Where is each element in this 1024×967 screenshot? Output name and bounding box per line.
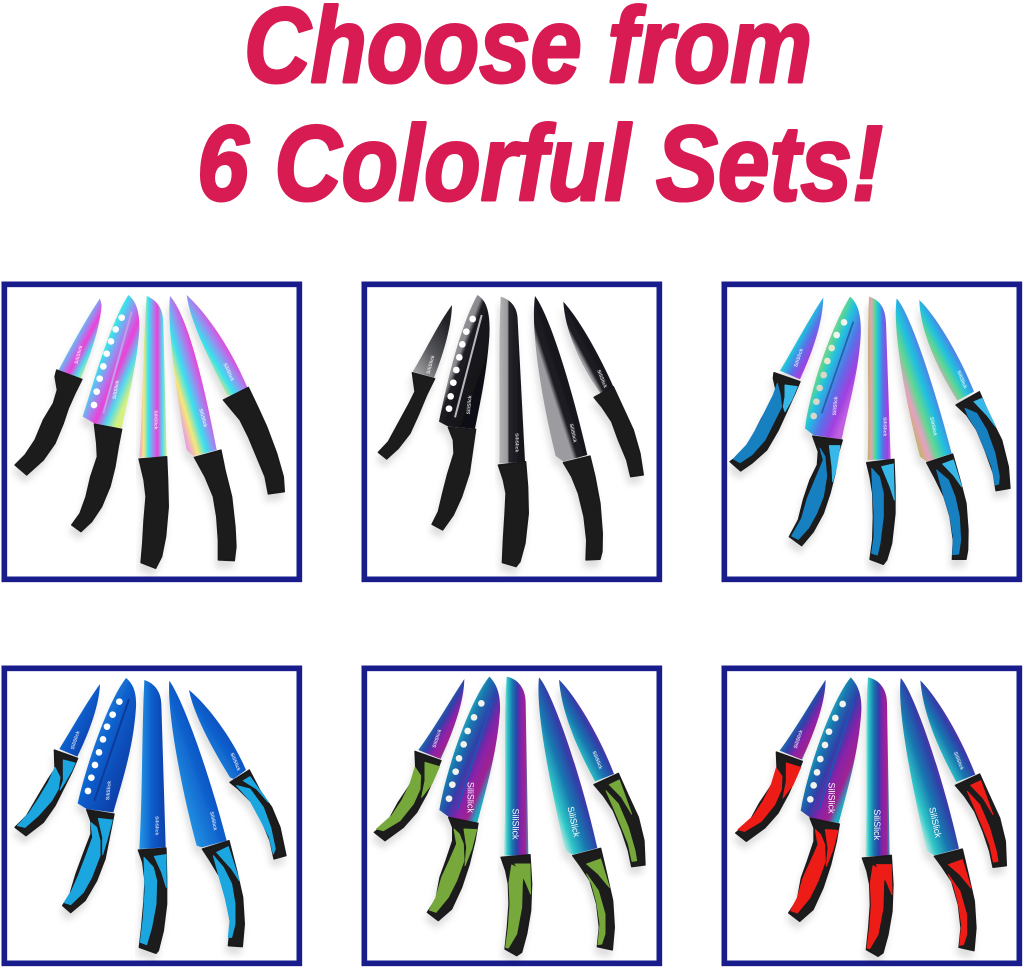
knife: paring: SiliSlick [793, 348, 805, 368]
knife: chef: SiliSlick [928, 416, 938, 437]
panel: rainbow blades with black handles [4, 284, 299, 579]
knife: bread: SiliSlick [153, 816, 159, 835]
knife: paring [374, 679, 464, 841]
knife: utility [920, 680, 1006, 867]
panel frame [364, 284, 659, 579]
knife: utility [563, 302, 643, 477]
knife: santoku: SiliSlick [832, 396, 840, 416]
panel frame [4, 668, 299, 963]
knife: utility: SiliSlick [229, 752, 241, 772]
knife: bread: SiliSlick [872, 809, 882, 841]
knife: santoku [63, 678, 136, 913]
panel frame [724, 668, 1019, 963]
knife: santoku [789, 297, 861, 546]
knife: utility: SiliSlick [595, 369, 608, 389]
panel: black blades with black handles [364, 284, 659, 579]
knife: utility: SiliSlick [955, 370, 968, 390]
knife: santoku: SiliSlick [112, 380, 121, 400]
knife: bread: SiliSlick [881, 417, 887, 436]
knife: bread: SiliSlick [511, 809, 521, 840]
knife: chef [169, 681, 244, 947]
knife: santoku: SiliSlick [105, 781, 113, 800]
knife: chef: SiliSlick [568, 423, 578, 443]
panel: rainbow blades with blue handles [724, 284, 1019, 579]
knife: santoku [427, 677, 500, 921]
knife: utility [187, 295, 284, 494]
knife: bread [501, 677, 532, 956]
knife: paring: SiliSlick [426, 355, 436, 375]
knife: paring: SiliSlick [70, 730, 82, 750]
knife: paring [15, 684, 100, 836]
panel: oil-slick blades with green handles [364, 668, 659, 963]
knife: chef: SiliSlick [197, 408, 208, 428]
knife: paring: SiliSlick [432, 728, 443, 749]
knife: chef: SiliSlick [208, 811, 218, 831]
knife: santoku [432, 295, 490, 530]
knife: chef [534, 296, 602, 560]
knife: bread [138, 680, 167, 953]
knife: chef: SiliSlick [927, 806, 943, 839]
knife: santoku [72, 295, 139, 532]
knife: bread [862, 677, 893, 956]
knife: utility: SiliSlick [221, 362, 235, 382]
knife: santoku: SiliSlick [827, 783, 837, 814]
knife: santoku: SiliSlick [466, 395, 474, 415]
title [197, 0, 883, 223]
knife: bread: SiliSlick [513, 433, 519, 452]
knife: bread [867, 297, 895, 564]
knife: paring: SiliSlick [74, 345, 84, 365]
knife: santoku [789, 677, 861, 921]
knife: utility: SiliSlick [591, 750, 603, 770]
title: 6 Colorful Sets! [197, 103, 883, 223]
panel frame [364, 668, 659, 963]
knife: bread [139, 296, 168, 568]
knife: paring: SiliSlick [793, 729, 805, 749]
knife: utility [559, 680, 645, 867]
knife: bread: SiliSlick [153, 410, 159, 430]
panel frame [4, 284, 299, 579]
knife: bread [498, 297, 528, 567]
knife: santoku: SiliSlick [465, 782, 475, 813]
knife: chef [900, 678, 976, 951]
knife: chef: SiliSlick [565, 806, 582, 838]
knife: chef [538, 677, 614, 950]
panel frame [724, 284, 1019, 579]
knife: chef [896, 298, 968, 559]
panel: oil-slick blades with red handles [724, 668, 1019, 963]
panel: blue blades with blue handles [4, 668, 299, 963]
knife: paring [736, 680, 826, 841]
knife: utility [189, 690, 286, 859]
knife: utility [919, 300, 1010, 491]
knife: paring [378, 305, 452, 459]
knife: paring [15, 298, 102, 475]
knife: utility: SiliSlick [952, 751, 965, 771]
knife: paring [730, 297, 823, 471]
knife: chef [169, 296, 236, 561]
